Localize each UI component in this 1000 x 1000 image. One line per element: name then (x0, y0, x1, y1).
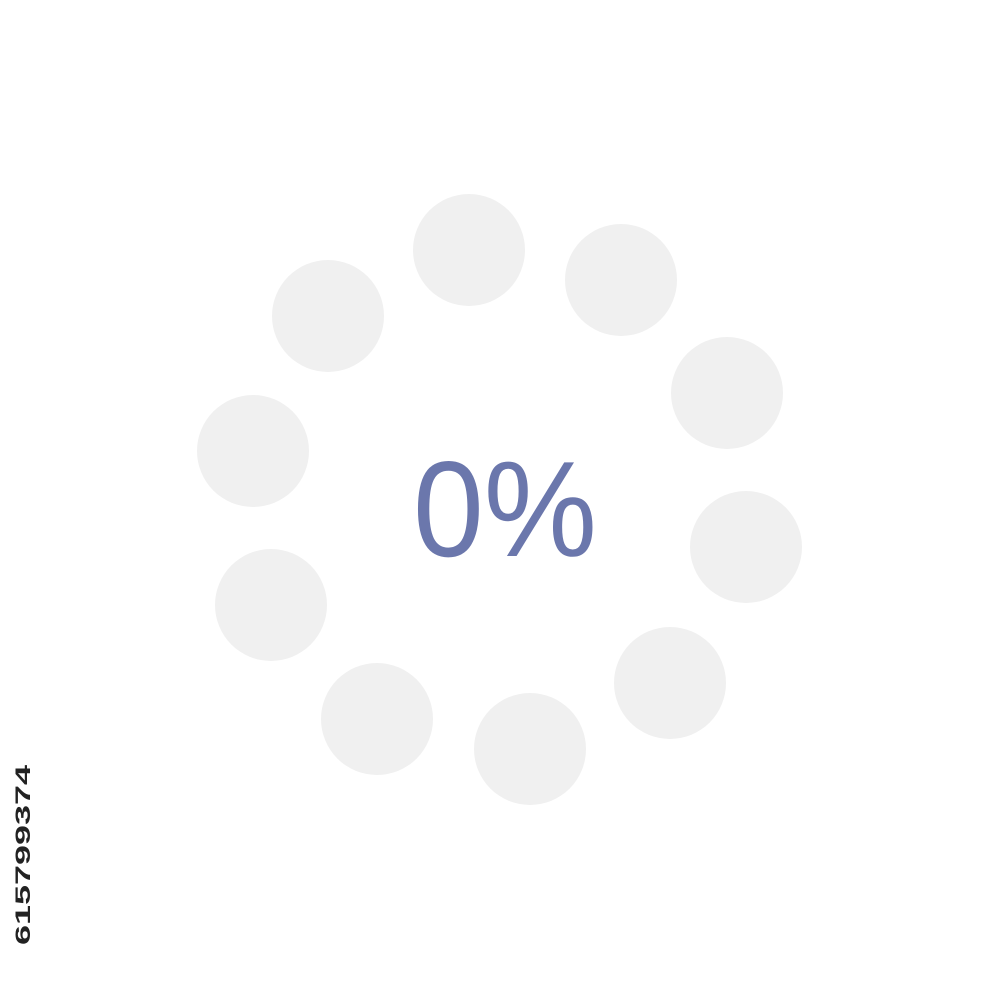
spinner dots (197, 194, 802, 805)
stock id: 615799374 (12, 764, 35, 945)
percentage label: 0% (413, 433, 597, 585)
